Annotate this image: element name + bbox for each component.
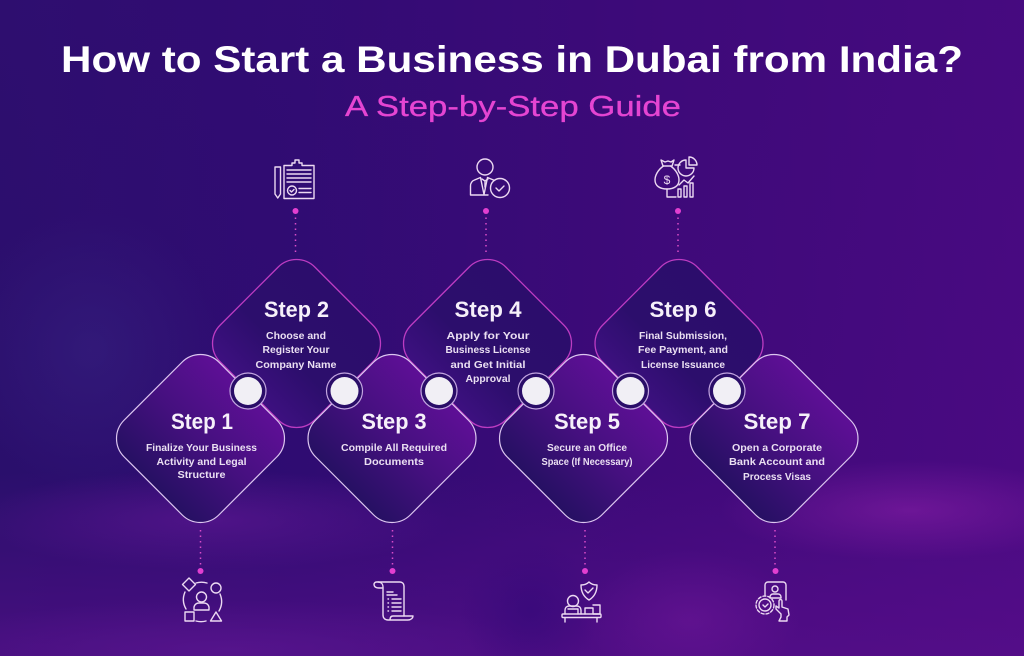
panel: step 1 — [106, 344, 295, 533]
panel: step 4 — [393, 249, 582, 438]
panel: step 7: Process Visas — [743, 471, 811, 483]
panel: step 2: Company Name — [256, 359, 337, 371]
panel: step 1: Step 1 — [171, 409, 233, 434]
icon: businessperson with check — [470, 159, 510, 198]
panel: step 6: Step 6 — [650, 297, 716, 322]
subtitle: A Step-by-Step Guide — [345, 91, 681, 123]
icon: desk with shield — [562, 582, 601, 622]
panel: step 3: Documents — [364, 456, 424, 468]
panel: step 3: Step 3 — [362, 409, 426, 434]
panel: step 2: Register Your — [262, 344, 330, 356]
panel: step 4: Step 4 — [454, 297, 522, 322]
panel: step 6: Fee Payment, and — [638, 344, 728, 356]
panel: step 5: Space (If Necessary) — [542, 456, 632, 468]
panel: step 4: and Get Initial — [450, 359, 526, 371]
panel: step 4: Approval — [466, 373, 511, 385]
panel: step 7: Step 7 — [744, 409, 810, 434]
panel: step 5: Step 5 — [554, 409, 620, 434]
panel: step 3 — [297, 344, 487, 533]
panel: step 6: Final Submission, — [639, 330, 727, 342]
icon: scroll document — [374, 582, 413, 620]
panel: step 5 — [489, 344, 678, 533]
panel: step 3: Compile All Required — [341, 442, 447, 454]
icon: money bag and charts: $ — [664, 173, 671, 187]
panel: step 7 — [679, 344, 869, 533]
title: How to Start a Business in Dubai from India? — [61, 39, 963, 80]
dotted connectors — [198, 208, 778, 574]
panel: step 5: Secure an Office — [547, 442, 627, 454]
icon: clipboard and pencil — [275, 160, 314, 198]
icon: team with shapes — [182, 578, 222, 622]
panel: step 4: Apply for Your — [446, 330, 530, 342]
panel: step 7: Bank Account and — [729, 456, 825, 468]
panel: step 1: Activity and Legal — [156, 456, 247, 468]
panel: step 6: License Issuance — [641, 359, 725, 371]
connector knobs — [230, 373, 745, 409]
icon: profile with gear and hand — [756, 582, 789, 621]
panel: step 1: Structure — [178, 469, 226, 481]
panel: step 6 — [584, 249, 774, 438]
icon: money bag and charts — [655, 157, 697, 197]
panel: step 1: Finalize Your Business — [146, 442, 257, 454]
panel: step 2 — [202, 249, 391, 438]
panel: step 4: Business License — [446, 344, 531, 356]
panel: step 7: Open a Corporate — [732, 442, 822, 454]
panel: step 2: Step 2 — [264, 297, 329, 322]
panel: step 2: Choose and — [266, 330, 326, 342]
